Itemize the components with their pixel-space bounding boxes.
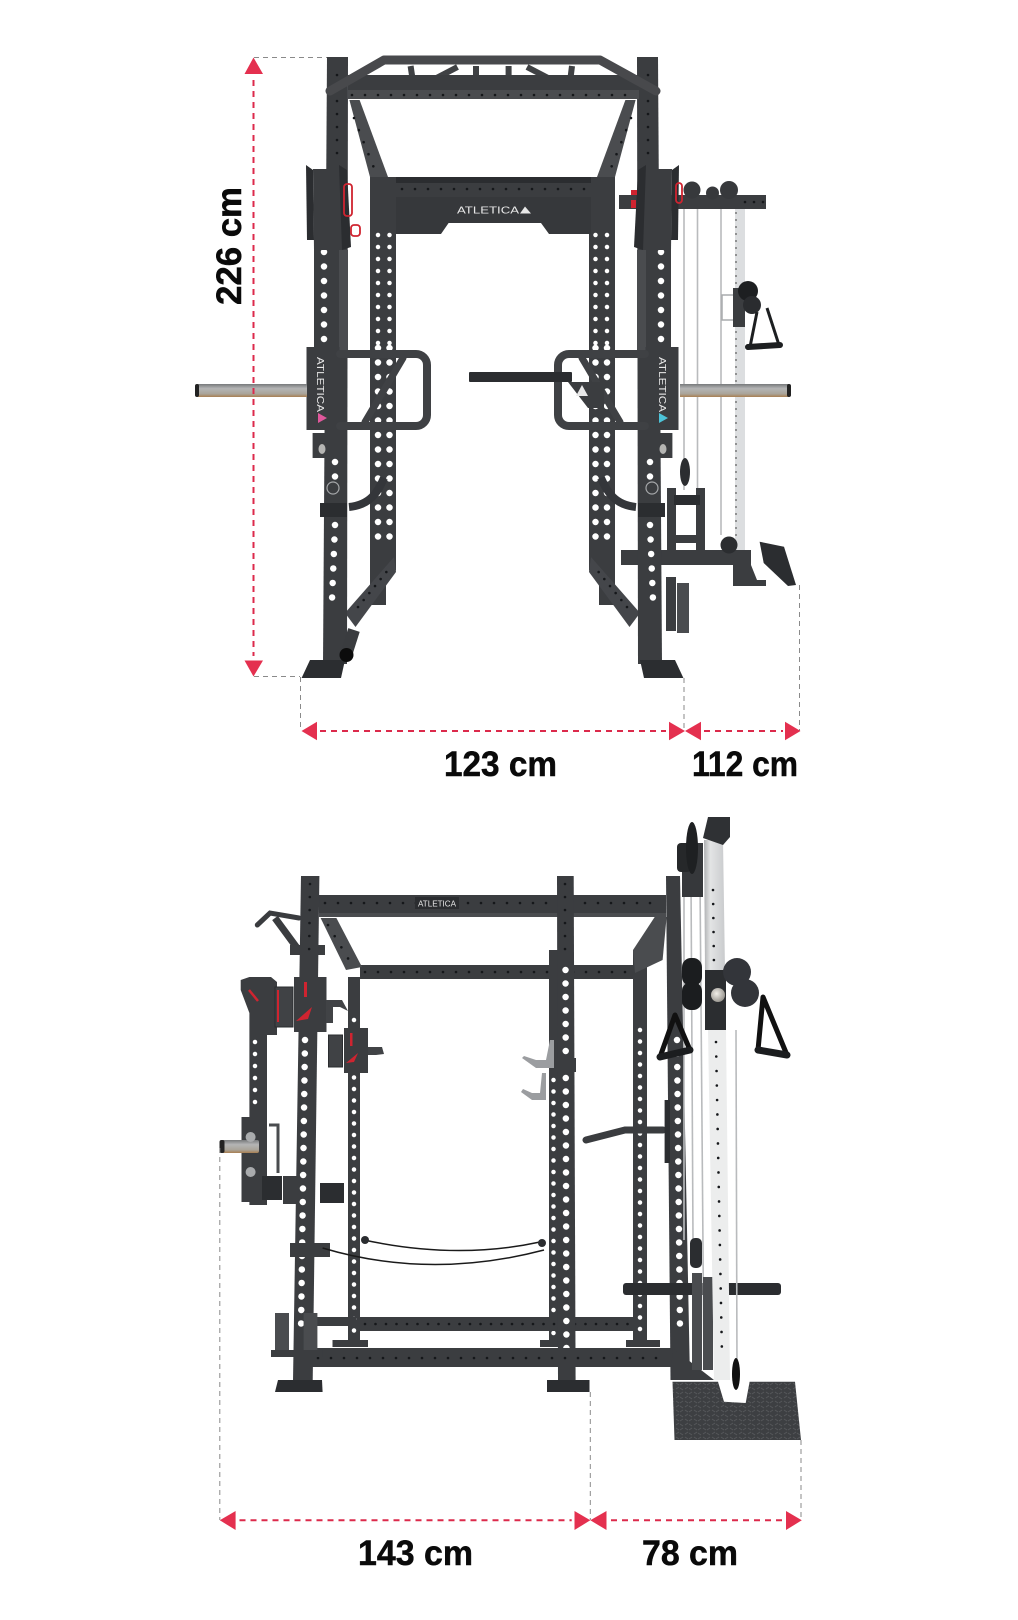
front view rack — [195, 57, 796, 678]
lower side beam and plate holders — [271, 1313, 672, 1367]
side arm (dip handle) — [586, 1100, 670, 1163]
top side beam — [319, 895, 666, 970]
left plate logo — [314, 357, 327, 423]
left plate logo: ATLETICA — [314, 357, 326, 412]
left side frame (mirrored for right) — [302, 57, 427, 678]
cable tower, side view — [623, 817, 801, 1440]
lower plate — [328, 1028, 384, 1073]
width dimension: 112 cm — [685, 585, 800, 784]
right barbell sleeve — [680, 384, 791, 397]
rear crossbeam with logo — [396, 177, 591, 234]
tower column — [677, 817, 737, 1380]
upper right plate handle — [631, 183, 682, 208]
cable tower, front view — [619, 181, 796, 633]
label 226 cm: 226 cm — [210, 187, 249, 305]
left attachment plates — [220, 977, 384, 1205]
resistance bands — [290, 1236, 546, 1265]
label 143 cm: 143 cm — [358, 1534, 473, 1573]
right handle — [758, 997, 787, 1055]
label 123 cm: 123 cm — [444, 745, 557, 784]
treadplate base — [672, 1382, 801, 1440]
carriage pulleys — [682, 958, 759, 1010]
height dimension: 226 cm — [210, 58, 327, 676]
width dimension: 123 cm — [300, 677, 685, 784]
right plate logo: ATLETICA — [656, 357, 668, 412]
left barbell sleeve — [195, 384, 307, 397]
side view rack — [220, 817, 801, 1440]
label 112 cm: 112 cm — [692, 745, 798, 784]
right side frame — [558, 57, 683, 678]
middle plate — [294, 977, 348, 1032]
ATLETICA logo on crossbeam: ATLETICA — [457, 206, 519, 216]
top crossbeam and pull-up bar — [330, 60, 656, 99]
depth dimension: 143 cm — [220, 1148, 590, 1573]
J-hooks — [521, 1040, 576, 1100]
landmine horn — [340, 630, 354, 662]
depth dimension: 78 cm — [590, 1440, 802, 1573]
upper left plate handles — [344, 184, 360, 236]
rear frame — [332, 917, 667, 1347]
left handle — [660, 1015, 690, 1057]
label 78 cm: 78 cm — [642, 1534, 738, 1573]
pull-up bar seen from side — [257, 913, 325, 955]
far-left plate and column — [220, 977, 344, 1205]
rod and gusset on right safety — [469, 372, 604, 408]
front posts — [275, 876, 690, 1392]
ATLETICA logo on top beam: ATLETICA — [418, 900, 457, 908]
